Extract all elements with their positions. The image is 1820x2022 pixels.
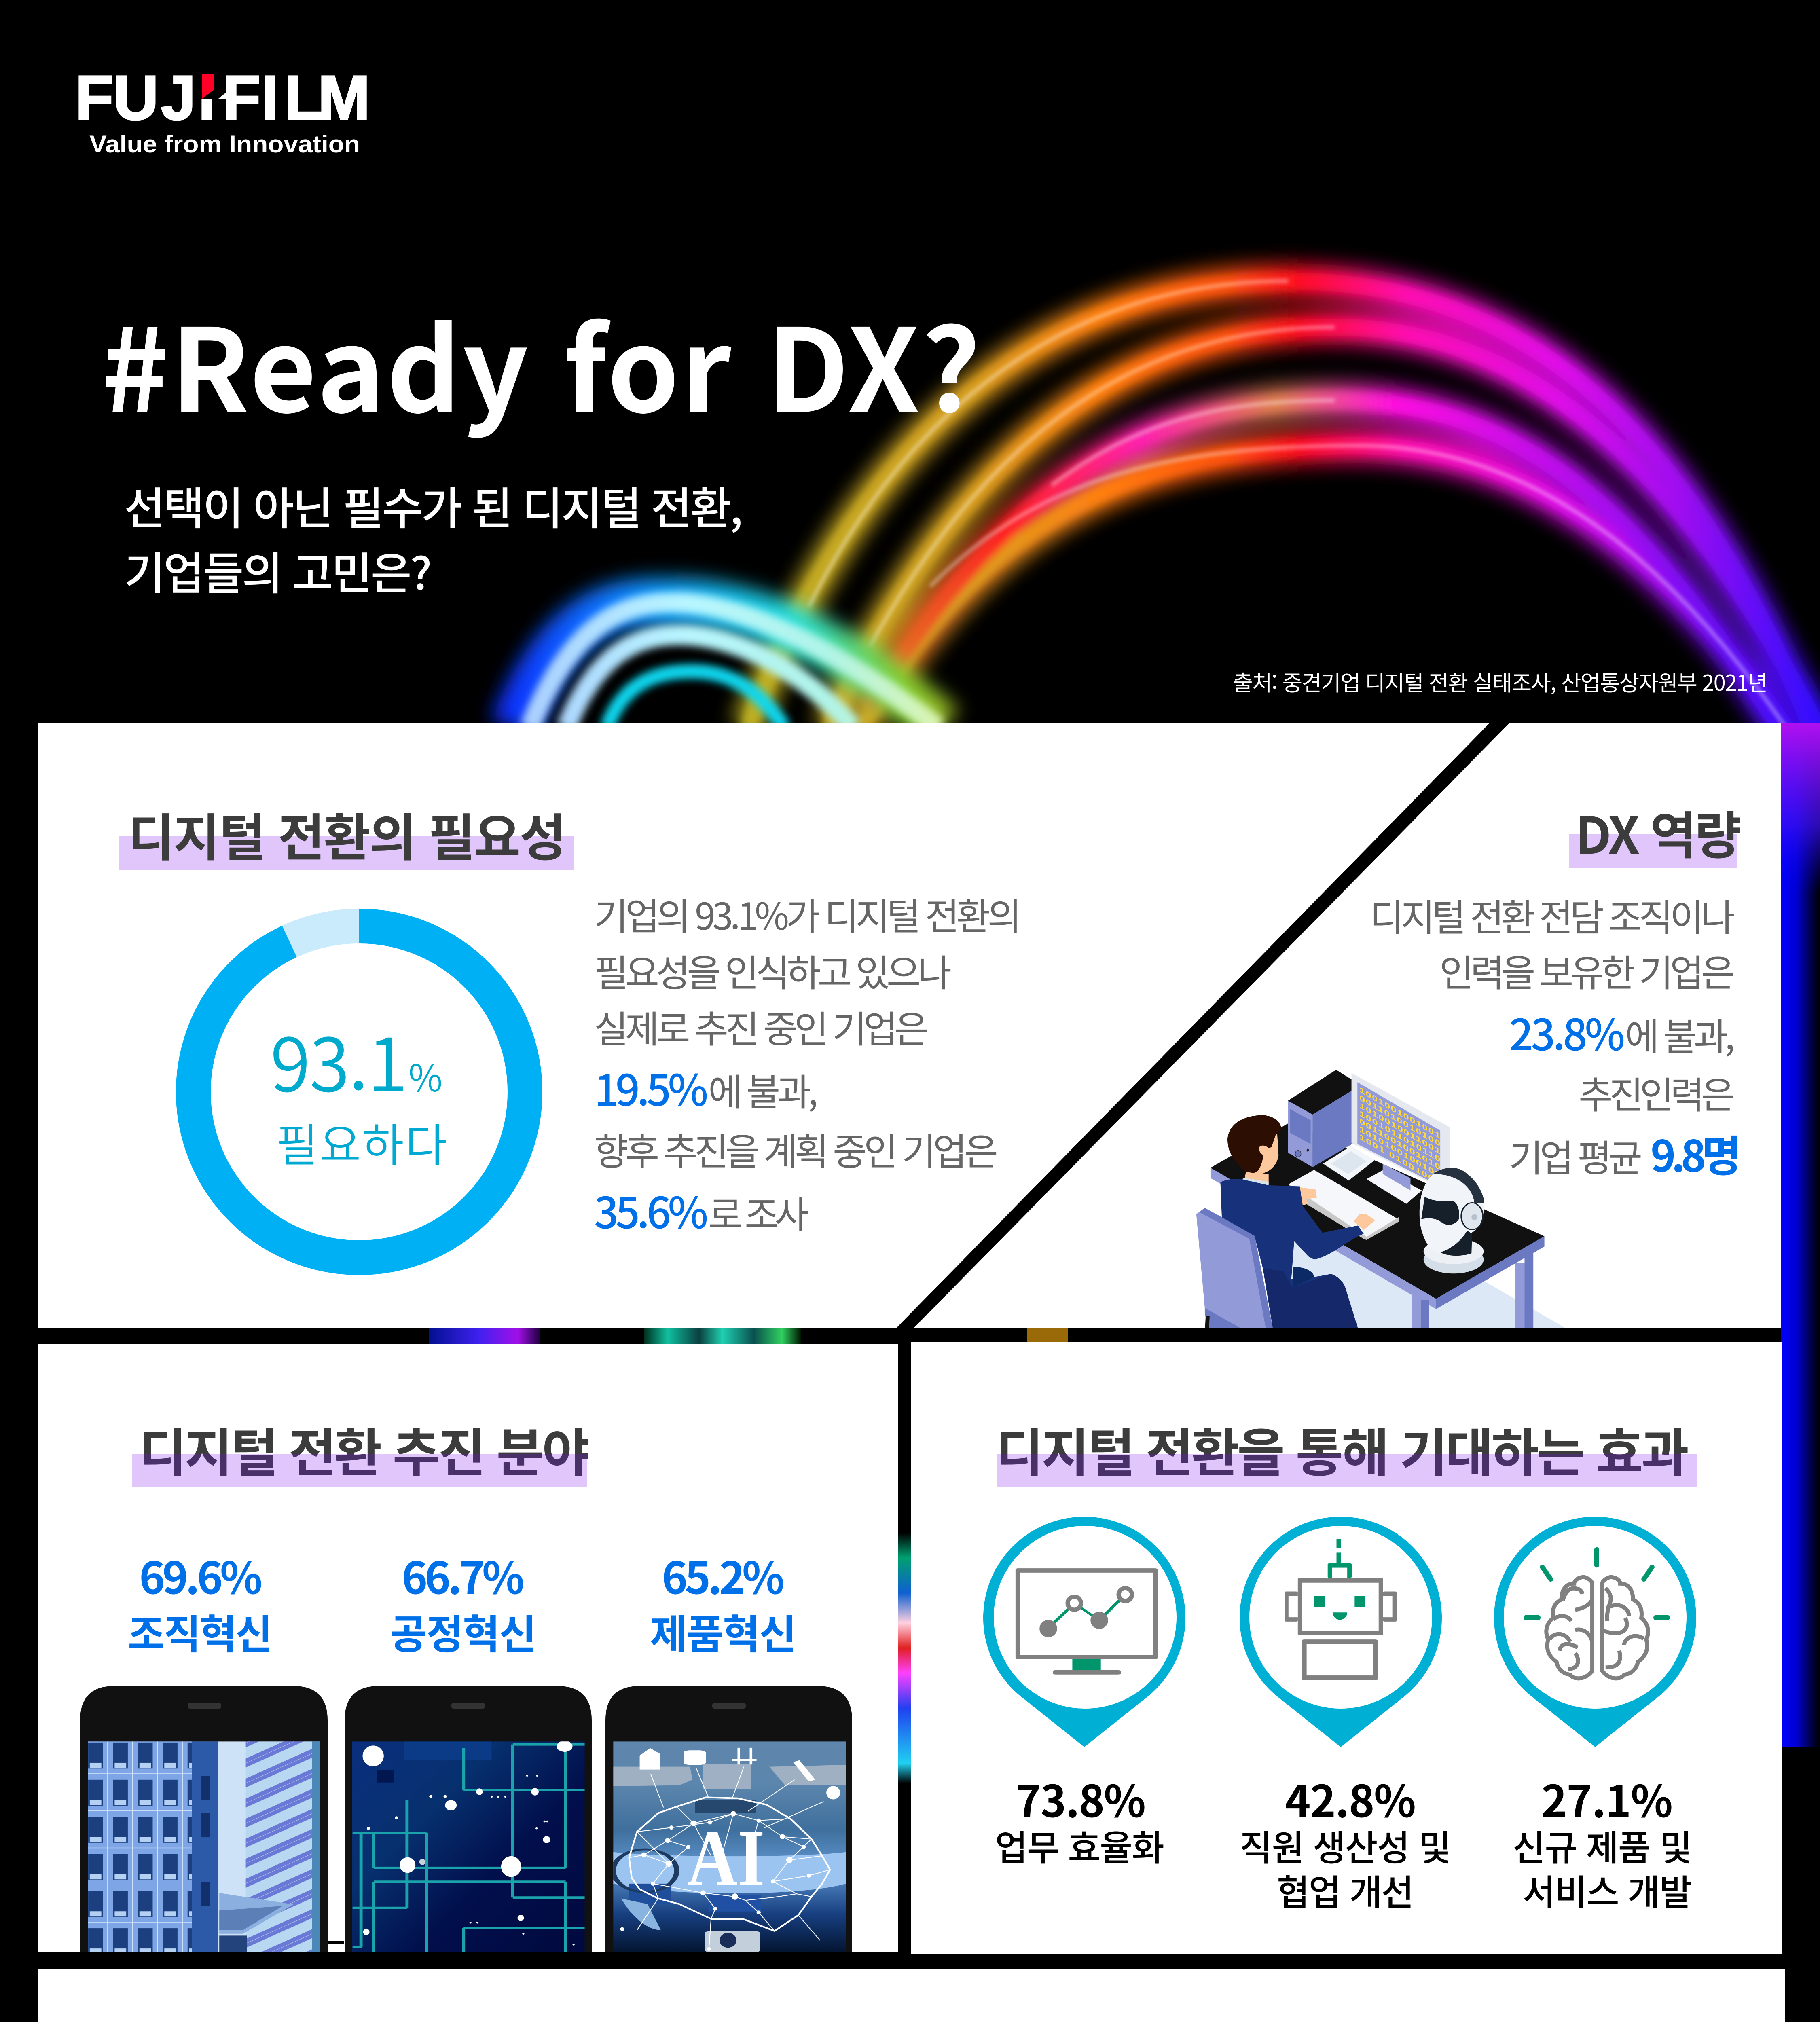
stat: process 66.7% xyxy=(390,1543,536,1660)
stat: organization 69.6% xyxy=(128,1543,273,1660)
illustration: person at desk with robot xyxy=(1196,1070,1566,1329)
panel: expected effects xyxy=(911,1342,1782,1954)
stat: work efficiency 73.8%: 업무 효율화 xyxy=(995,1820,1164,1871)
monitor binary digits: 1010010011001 xyxy=(1359,1101,1440,1156)
stat: product 65.2% xyxy=(650,1543,796,1660)
text: DX capability description: 기업 평균 xyxy=(1509,1129,1642,1182)
text: need description: 향후 추진을 계획 중인 기업은 xyxy=(594,1122,998,1176)
stat: new products 27.1%: 서비스 개발 xyxy=(1523,1864,1692,1916)
AI label: AI xyxy=(687,1814,765,1903)
text: DX capability description: 추진인력은 xyxy=(1579,1066,1735,1119)
text: need description: 필요성을 인식하고 있으나 xyxy=(594,943,952,997)
monitor binary digits: 0011001001010 xyxy=(1359,1117,1440,1172)
stat: work efficiency 73.8% xyxy=(995,1767,1164,1871)
text: DX capability description: 인력을 보유한 기업은 xyxy=(1439,943,1735,997)
stat: new products 27.1% xyxy=(1513,1767,1692,1916)
text: need description: 로 조사 xyxy=(708,1185,809,1239)
phone: AI car interior image xyxy=(605,1686,852,1952)
icon: monitor chart pin xyxy=(983,1516,1185,1747)
text: need description xyxy=(594,887,1022,1241)
text: need description: 실제로 추진 중인 기업은 xyxy=(594,1000,929,1053)
title: #Ready for DX? xyxy=(101,279,981,446)
stat: new products 27.1%: 27.1% xyxy=(1541,1767,1673,1830)
stat: employee productivity 42.8%: 협업 개선 xyxy=(1277,1864,1414,1916)
panel: digital transformation focus areas xyxy=(38,1344,898,1954)
stat: new products 27.1%: 신규 제품 및 xyxy=(1513,1820,1692,1871)
text: DX capability description: 디지털 전환 전담 조직이나 xyxy=(1370,888,1735,942)
stat: process 66.7%: 공정혁신 xyxy=(390,1602,536,1660)
donut chart: 93.1%: % xyxy=(408,1049,442,1102)
text: DX capability description: 23.8% xyxy=(1509,1000,1625,1063)
icon: robot pin xyxy=(1240,1516,1442,1747)
stat: organization 69.6%: 조직혁신 xyxy=(128,1602,273,1660)
panel: obstacles chart xyxy=(38,1969,1785,2022)
text: need description: 35.6% xyxy=(594,1178,708,1241)
stat: process 66.7%: 66.7% xyxy=(402,1543,525,1607)
text: need description: 에 불과, xyxy=(708,1063,818,1117)
text: DX capability description: 에 불과, xyxy=(1625,1007,1735,1061)
logo: Fujifilm: FUJIFILM xyxy=(75,63,370,133)
donut chart: 93.1%: 93.1 xyxy=(270,1007,408,1113)
stat: organization 69.6%: 69.6% xyxy=(139,1543,262,1607)
stat: employee productivity 42.8%: 42.8% xyxy=(1285,1767,1416,1830)
text: need description: 19.5% xyxy=(594,1056,708,1118)
monitor binary digits: 1001 01001001 xyxy=(1359,1132,1440,1188)
phone: circuit image xyxy=(345,1686,592,1952)
monitor binary digits xyxy=(1360,1088,1440,1178)
icon: brain pin xyxy=(1494,1516,1696,1747)
phone: building photo xyxy=(80,1686,328,1954)
logo: red slash xyxy=(198,71,227,99)
donut chart: 93.1% xyxy=(193,926,525,1258)
stat: work efficiency 73.8%: 73.8% xyxy=(1016,1767,1146,1830)
background: arc glimpses in the gutters xyxy=(429,723,1820,1783)
monitor binary digits: 1001011010110 xyxy=(1359,1109,1440,1164)
stat: employee productivity 42.8%: 직원 생산성 및 xyxy=(1240,1820,1451,1871)
heading: expected effects: 디지털 전환을 통해 기대하는 효과 xyxy=(996,1411,1689,1486)
heading: need for digital transformation: 디지털 전환의 필요성 xyxy=(128,797,566,870)
stat: product 65.2%: 제품혁신 xyxy=(650,1602,796,1660)
text: DX capability description: 9.8명 xyxy=(1651,1122,1741,1184)
monitor binary digits: 0011010010100 xyxy=(1359,1093,1440,1148)
background: glowing rainbow arcs xyxy=(514,281,1820,748)
stat: employee productivity 42.8% xyxy=(1240,1767,1451,1916)
subtitle: 기업들의 고민은? xyxy=(124,538,432,603)
panel: need and DX capability xyxy=(38,723,1781,1329)
heading: focus areas: 디지털 전환 추진 분야 xyxy=(139,1411,590,1486)
source note: 출처: 중견기업 디지털 전환 실태조사, 산업통상자원부 2021년 xyxy=(1233,665,1768,697)
monitor binary digits: 1001001001001 xyxy=(1359,1085,1440,1141)
subtitle xyxy=(124,473,743,603)
heading: DX capability: DX 역량 xyxy=(1575,795,1741,868)
logo: Fujifilm: Value from Innovation xyxy=(89,131,360,158)
donut chart: 93.1%: 필요하다 xyxy=(276,1109,447,1175)
subtitle: 선택이 아닌 필수가 된 디지털 전환, xyxy=(124,473,743,537)
stat: product 65.2%: 65.2% xyxy=(662,1543,785,1607)
phones with images xyxy=(80,1686,852,1954)
text: DX capability description xyxy=(1370,888,1741,1184)
text: need description: 기업의 93.1%가 디지털 전환의 xyxy=(594,887,1022,941)
monitor binary digits: 1010100100101 xyxy=(1359,1125,1440,1180)
